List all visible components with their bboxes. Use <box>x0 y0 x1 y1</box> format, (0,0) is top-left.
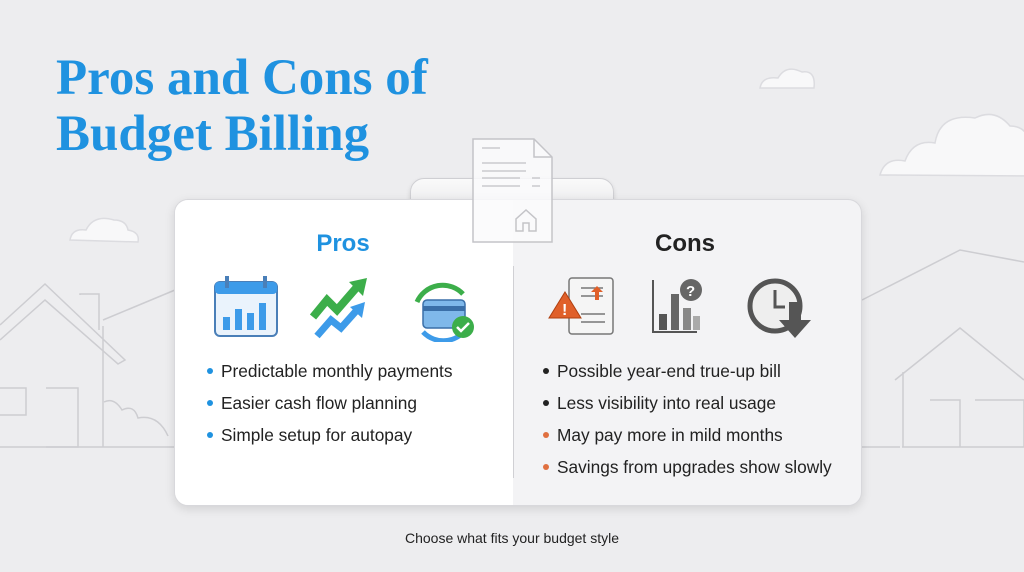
pros list: Predictable monthly payments <box>221 361 452 381</box>
pros list <box>207 361 452 445</box>
title: Budget Billing <box>56 106 369 162</box>
pros list: Easier cash flow planning <box>221 393 417 413</box>
clip tab <box>410 178 614 224</box>
title <box>56 50 428 162</box>
cons list <box>543 361 832 477</box>
footer caption: Choose what fits your budget style <box>405 530 619 546</box>
pros list: Simple setup for autopay <box>221 425 412 445</box>
cons list: Possible year-end true-up bill <box>557 361 781 381</box>
cons icons <box>548 277 811 338</box>
cons list: Savings from upgrades show slowly <box>557 457 832 477</box>
pros icons <box>214 276 474 342</box>
cons list: Less visibility into real usage <box>557 393 776 413</box>
document icon <box>472 138 553 243</box>
cons icons: ! <box>562 302 567 319</box>
cons icons: ? <box>686 283 695 300</box>
card <box>174 199 862 506</box>
cons heading: Cons <box>655 230 715 257</box>
pros heading: Pros <box>316 230 370 257</box>
title: Pros and Cons of <box>56 50 428 106</box>
cons list: May pay more in mild months <box>557 425 783 445</box>
